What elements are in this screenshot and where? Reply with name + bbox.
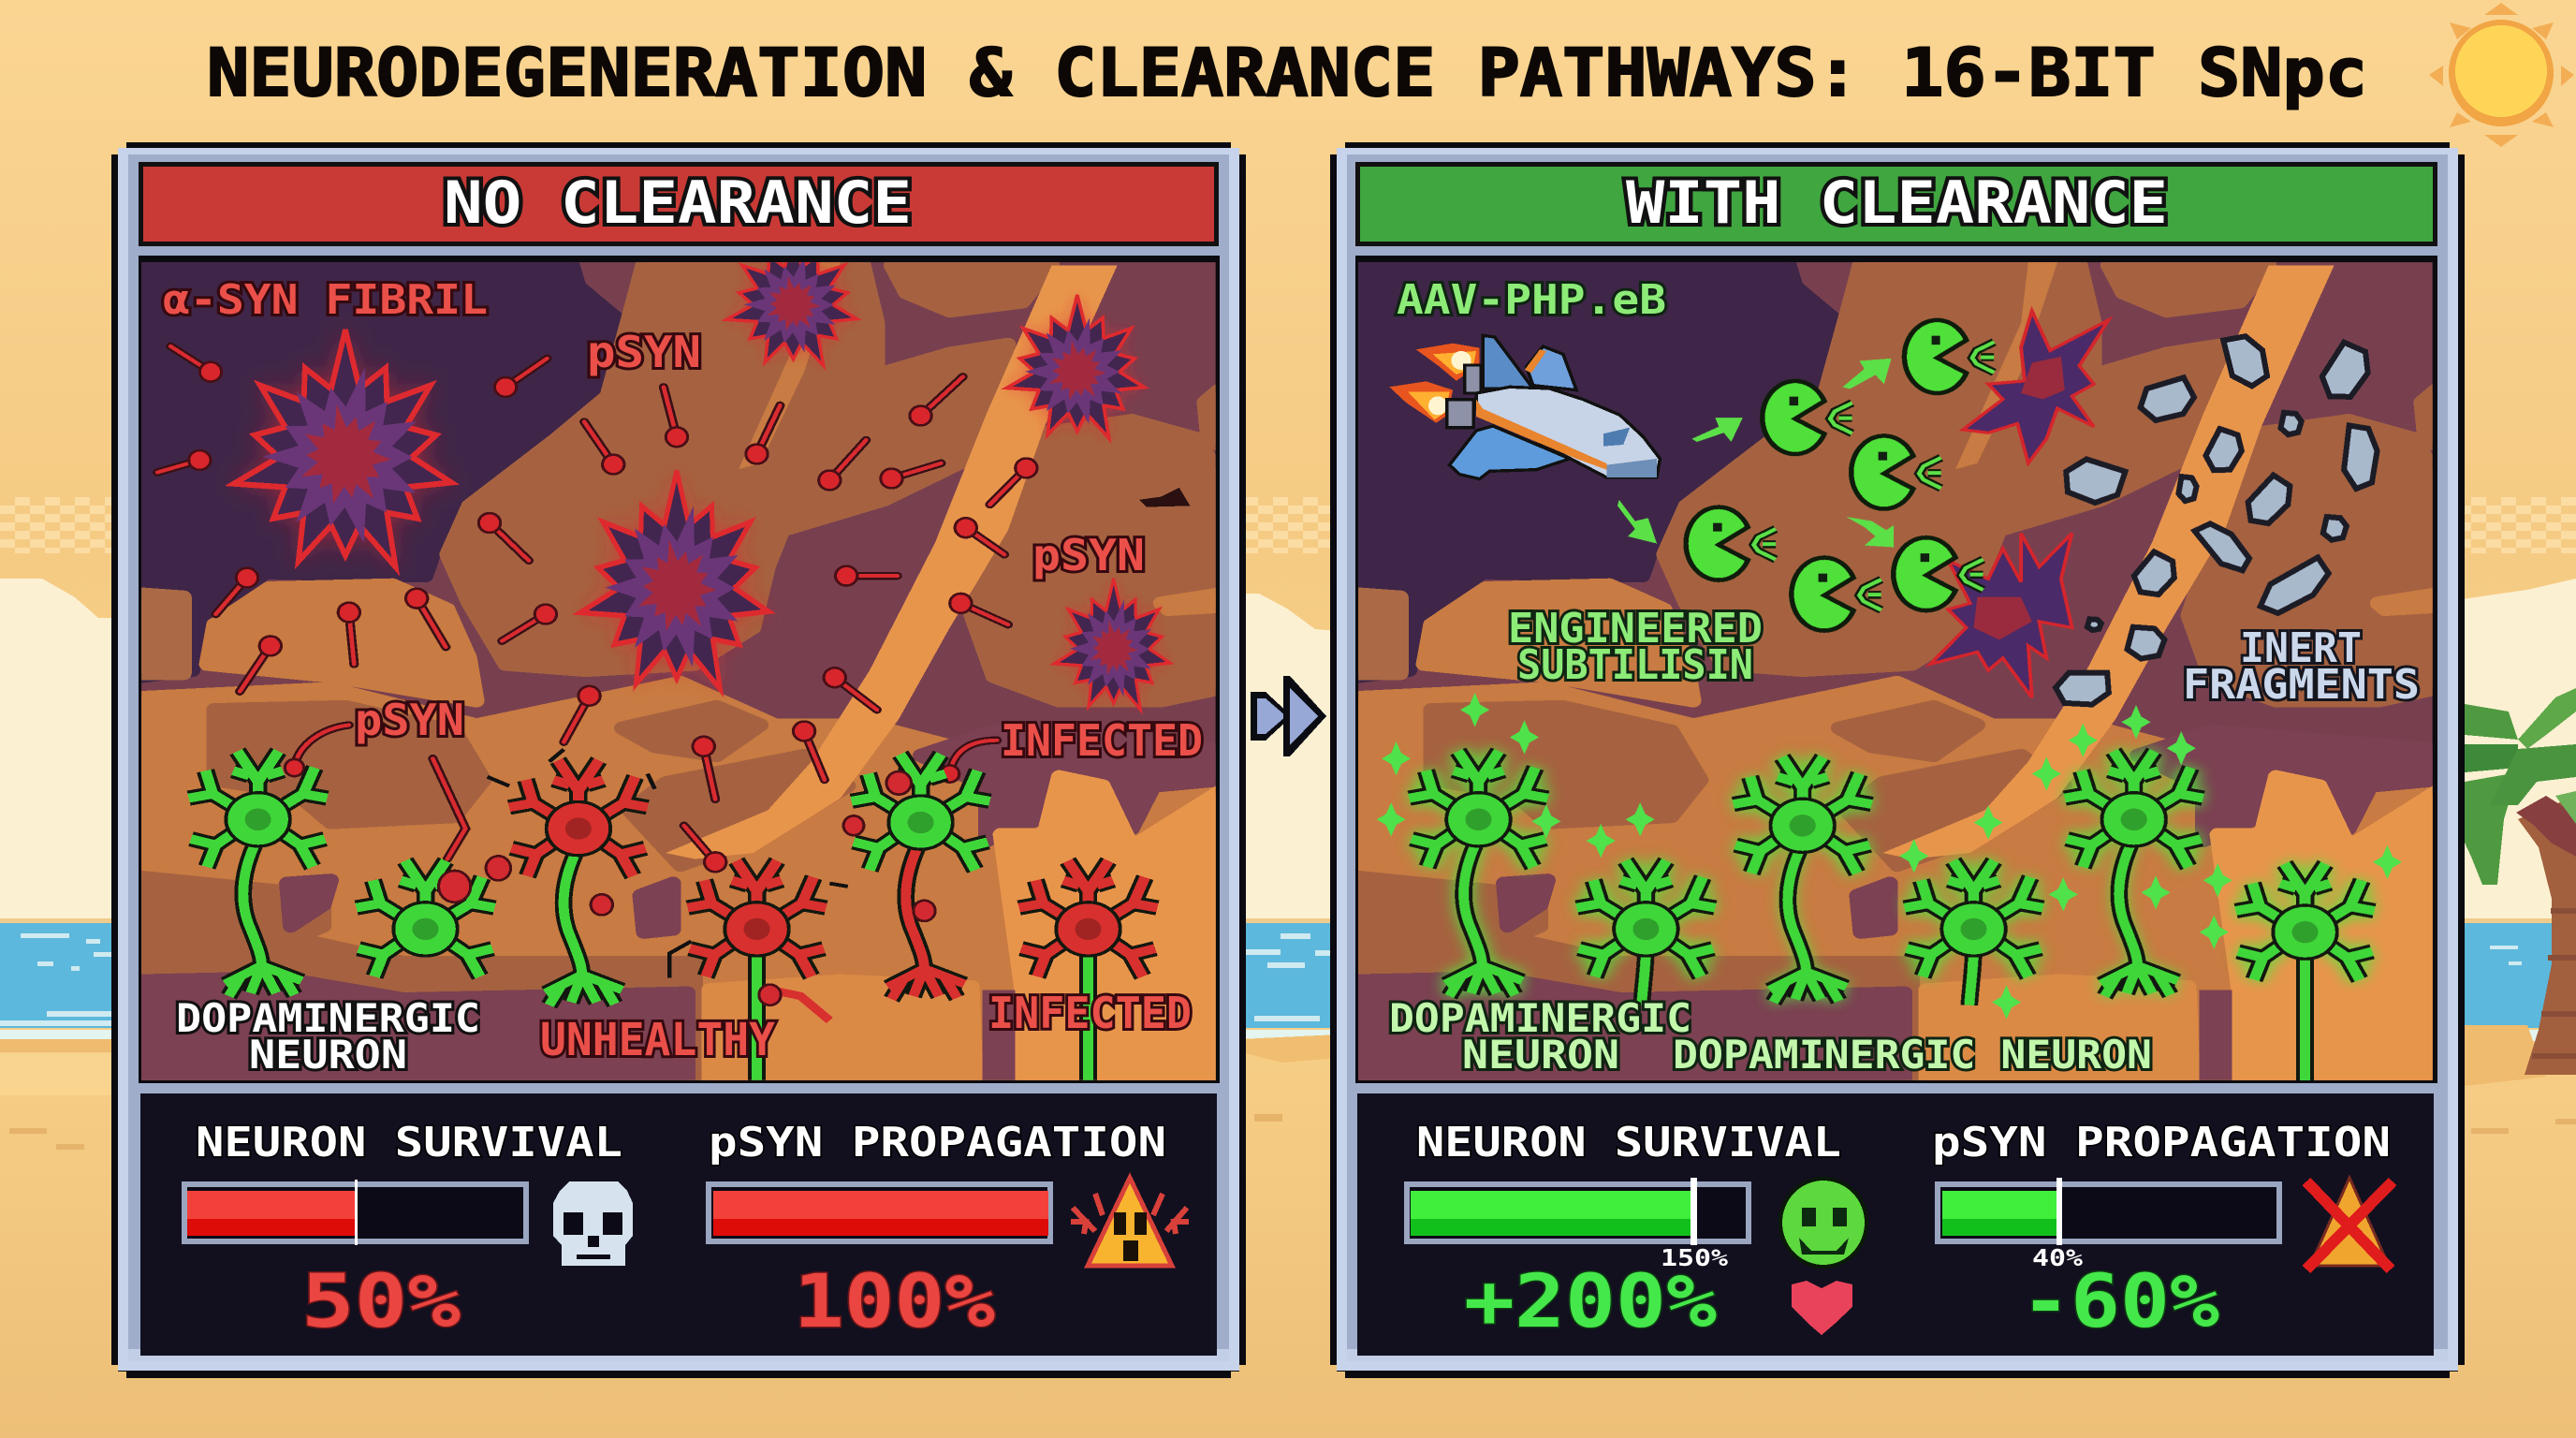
value: +200%: +200%: [1464, 1260, 1717, 1344]
label: unhealthy: UNHEALTHY: [540, 1014, 775, 1066]
neuron: healthy small with attached pSYN: [357, 856, 511, 976]
label: infected upper: INFECTED: [1001, 715, 1203, 766]
icon: AAV shuttle: [1389, 335, 1660, 479]
panel header: with clearance: [1355, 162, 2437, 246]
fibril: lower right: [1054, 579, 1170, 710]
icon: smiley: [1780, 1179, 1866, 1267]
label: infected lower: INFECTED: [988, 988, 1192, 1038]
label: subtilisin: SUBTILISIN: [1517, 641, 1753, 689]
bar: pSYN propagation 40%: [1938, 1178, 2279, 1245]
label: alpha-syn fibril: α-SYN FIBRIL: [163, 276, 488, 324]
scene: no clearance: [141, 235, 1220, 1088]
marker label: 40%: 40%: [2032, 1244, 2083, 1271]
label: fragments: FRAGMENTS: [2183, 661, 2420, 709]
sparkles: [1377, 693, 2402, 1020]
bar: pSYN propagation 100%: [709, 1184, 1050, 1241]
fibril: central: [580, 471, 768, 689]
header text: NO CLEARANCE: [444, 169, 912, 237]
value: 50%: 50%: [301, 1260, 461, 1344]
stat title: neuron survival: NEURON SURVIVAL: [1416, 1119, 1841, 1167]
broken fibril lower: [1930, 534, 2072, 697]
title: NEURODEGENERATION & CLEARANCE PATHWAYS: 16-BIT SNpc: [207, 35, 2367, 111]
icon: heart: [1792, 1281, 1852, 1335]
neuron: short 2: [1905, 861, 2042, 1005]
label: pSYN right: pSYN: [1032, 530, 1145, 580]
header text: WITH CLEARANCE: [1626, 169, 2168, 237]
pSYN particles: [157, 346, 1190, 872]
panel: with clearance: [1330, 142, 2465, 1378]
panel header: no clearance: [139, 162, 1219, 246]
value: -60%: -60%: [2021, 1260, 2219, 1344]
fibril: upper right: [1006, 295, 1145, 438]
fibril: large upper left: [234, 330, 451, 567]
neuron: infected red: [1019, 861, 1157, 1088]
label: dopaminergic: DOPAMINERGIC: [1389, 995, 1691, 1041]
neuron: tall 1: [1410, 751, 1547, 996]
neuron: healthy tall: [189, 751, 328, 996]
inert fragments: [2053, 331, 2378, 710]
icon: skull: [553, 1181, 633, 1266]
scene: with clearance: [1358, 262, 2437, 1091]
neuron: short 3: [2236, 864, 2374, 1091]
label: neuron: NEURON: [249, 1032, 407, 1078]
arrow between panels: [1251, 676, 1326, 756]
value: 100%: 100%: [794, 1260, 995, 1344]
icon: radiation warning: [1071, 1178, 1189, 1266]
label: dopaminergic neuron: DOPAMINERGIC NEURON: [1673, 1032, 2152, 1078]
label: engineered: ENGINEERED: [1508, 605, 1763, 653]
bar: neuron survival 150%: [1407, 1178, 1749, 1245]
neuron: unhealthy red: [488, 750, 655, 1005]
broken fibril upper: [1963, 311, 2108, 463]
neuron: short 1: [1577, 861, 1715, 1005]
palm tree: [2465, 688, 2576, 1075]
panel: no clearance: [111, 142, 1246, 1378]
icon: sun: [2429, 3, 2574, 147]
enzyme arrows: [1617, 359, 1894, 548]
stat title: pSYN propagation: pSYN PROPAGATION: [1932, 1119, 2391, 1167]
label: pSYN top: pSYN: [587, 327, 701, 377]
stat title: pSYN propagation: pSYN PROPAGATION: [709, 1119, 1166, 1167]
neuron: tall 3: [2065, 751, 2203, 996]
stats panel: with clearance: [1357, 1093, 2434, 1356]
icon: crossed-out warning: [2306, 1178, 2393, 1269]
fibril: top: [722, 262, 861, 371]
bar: neuron survival 50%: [184, 1180, 526, 1245]
subtilisin enzymes: [1686, 320, 1994, 631]
label: neuron: NEURON: [1462, 1032, 1619, 1078]
neuron: tall 2: [1734, 757, 1872, 1002]
marker label: 150%: 150%: [1661, 1244, 1728, 1271]
label: AAV-PHP.eB: AAV-PHP.eB: [1397, 276, 1666, 324]
stat title: neuron survival: NEURON SURVIVAL: [196, 1119, 622, 1167]
stats panel: no clearance: [140, 1093, 1217, 1356]
green glow behind neurons: [1410, 751, 2374, 1002]
label: inert: INERT: [2240, 624, 2362, 672]
label: pSYN lower: pSYN: [355, 695, 464, 745]
label: dopaminergic neuron: DOPAMINERGIC: [176, 995, 480, 1041]
neuron: unhealthy lower: [669, 861, 848, 1088]
neuron: infected with red axon: [843, 755, 989, 999]
